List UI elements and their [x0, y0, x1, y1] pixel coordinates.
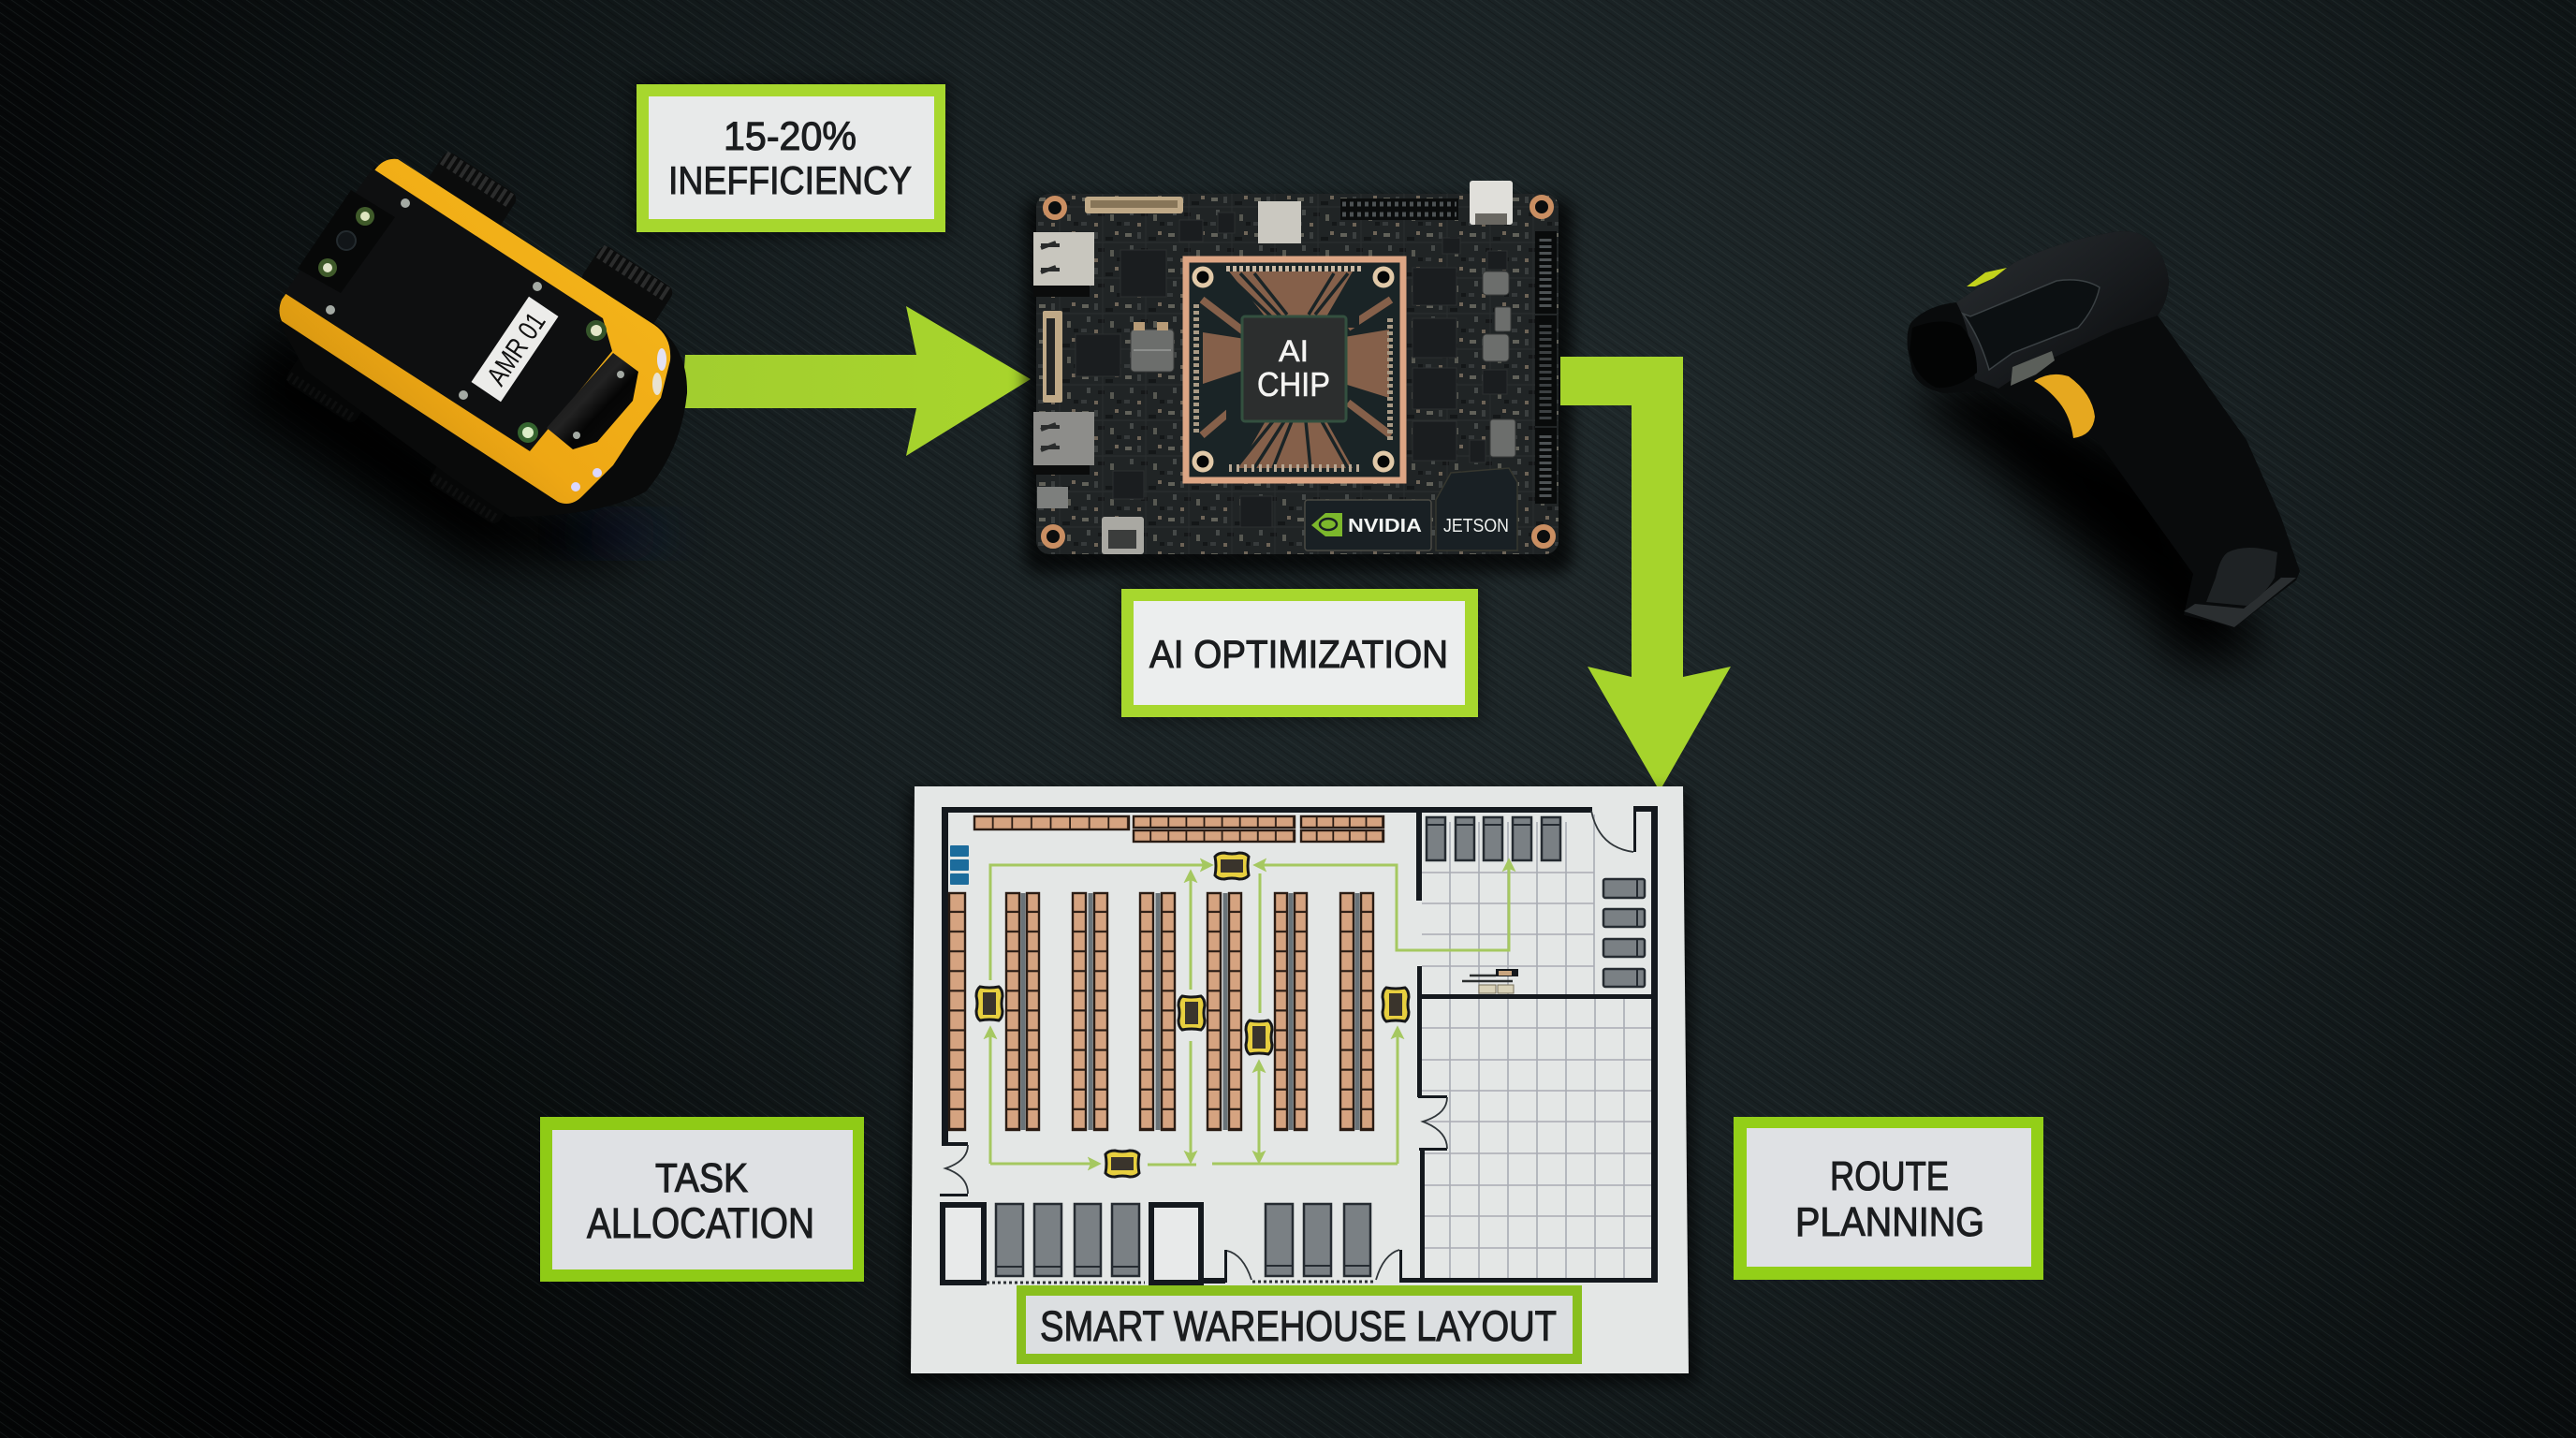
arrow: robot to AI chip: [681, 306, 1031, 456]
robot screws and LEDs: [326, 198, 607, 443]
circuit board: NVIDIA Jetson: [1025, 181, 1573, 573]
scanner grip highlight: [2206, 548, 2277, 606]
scanner green indicator: [1967, 268, 2007, 286]
pallet stack: [1462, 969, 1518, 993]
AI chip: AI: [1279, 334, 1309, 368]
dock doors: top: [1427, 817, 1560, 860]
callout: 15-20% inefficiency: [633, 81, 949, 236]
robot yellow shell: [279, 159, 670, 504]
arrow: AI chip to warehouse: [1560, 357, 1731, 791]
callout: AI optimization: [1118, 585, 1482, 721]
robot wheels: [284, 150, 676, 526]
top pallet racks: [974, 816, 1383, 842]
walls: [940, 806, 1658, 1284]
dotted dock lines: [987, 1282, 1376, 1283]
scanner window panel: [1963, 280, 2100, 370]
copper AI chip zone: [1186, 259, 1403, 480]
board shadow: [1025, 198, 1573, 573]
JETSON badge: JETSON: [1443, 516, 1509, 536]
dock doors: bottom: [996, 1204, 1370, 1276]
barcode scanner: [1908, 231, 2300, 665]
robot top plate: [285, 169, 612, 451]
loading bays: [943, 1205, 1201, 1283]
left ports: [1033, 232, 1144, 554]
callout: AI optimization: AI OPTIMIZATION: [1149, 632, 1448, 676]
robot blue glow: [576, 519, 669, 549]
scanner base cap: [2184, 578, 2296, 627]
icon: NVIDIA eye: [1311, 513, 1342, 536]
AI chip: CHIP: [1257, 365, 1330, 404]
blue storage bins: [950, 845, 969, 885]
scanner lens: [1910, 321, 1977, 388]
scanner body: [1908, 231, 2300, 627]
scanner sticker: [2011, 351, 2055, 386]
NVIDIA badge: NVIDIA: [1348, 516, 1422, 536]
warehouse floor plan sheet: [904, 786, 1696, 1384]
scanner head highlight: [1956, 231, 2169, 389]
robot camera module: [298, 190, 395, 293]
sheet shadow: [904, 791, 1696, 1384]
AMR route arrows: [990, 865, 1509, 1165]
grid lines: storage rooms: [1422, 814, 1653, 1278]
scanner trigger: [2034, 374, 2095, 438]
callout: route planning: PLANNING: [1795, 1199, 1984, 1245]
callout: 15-20% inefficiency: INEFFICIENCY: [668, 158, 912, 202]
robot ID label: AMR 01: [481, 307, 552, 391]
callout: route planning: ROUTE: [1830, 1153, 1949, 1199]
mini AMR robots: [976, 853, 1409, 1177]
scanner shadow: [1910, 374, 2265, 665]
door swings: [945, 811, 1633, 1280]
right header connectors: [1535, 231, 1557, 504]
AI chip: [1242, 316, 1346, 421]
sheet paper: [911, 786, 1689, 1373]
robot: AMR 01: [234, 150, 687, 562]
callout: 15-20% inefficiency: 15-20%: [724, 114, 856, 159]
vertical pallet racks: [949, 893, 1373, 1130]
title: smart warehouse layout: SMART WAREHOUSE LAYOUT: [1040, 1302, 1557, 1350]
integrated circuits: [1076, 213, 1515, 527]
callout: route planning: [1734, 1117, 2043, 1280]
callout: task allocation: [540, 1117, 864, 1282]
robot base: [279, 167, 687, 517]
callout: task allocation: TASK: [655, 1155, 748, 1201]
NVIDIA badge: [1305, 500, 1431, 550]
JETSON badge: [1436, 468, 1517, 550]
top connectors: [1085, 181, 1513, 243]
robot lidar block: [547, 353, 638, 449]
title: smart warehouse layout: [1017, 1285, 1582, 1364]
board surface: [1036, 194, 1559, 554]
copper traces: [1196, 269, 1391, 468]
dock doors: right: [1603, 879, 1645, 987]
callout: task allocation: ALLOCATION: [587, 1199, 814, 1247]
robot shadow: [234, 318, 655, 562]
robot front lights: [571, 348, 666, 492]
mounting holes: [1044, 198, 1553, 546]
